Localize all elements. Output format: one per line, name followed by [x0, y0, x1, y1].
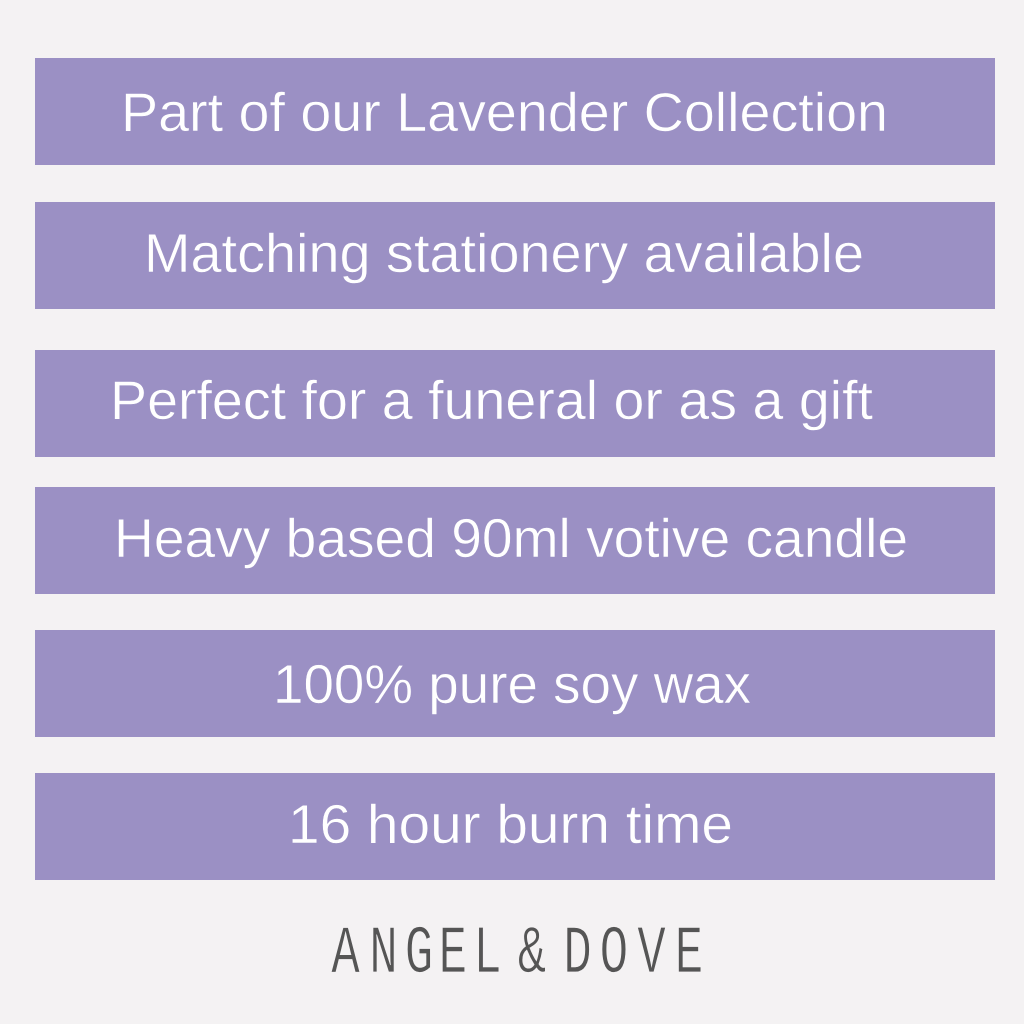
panel: soy wax: [35, 630, 995, 737]
panel: votive candle: [35, 487, 995, 594]
panel: burn time: [35, 773, 995, 880]
panel: matching stationery: Matching stationery available: [144, 222, 864, 284]
logo: Angel & Dove: ANGEL&DOVE: [331, 915, 703, 993]
panel: burn time: 16 hour burn time: [288, 793, 733, 855]
panel: funeral or gift: Perfect for a funeral or as a gift: [110, 369, 873, 431]
panel: lavender collection: [35, 58, 995, 165]
panel: soy wax: 100% pure soy wax: [273, 653, 751, 715]
panel: funeral or gift: [35, 350, 995, 457]
panel: matching stationery: [35, 202, 995, 309]
panel: votive candle: Heavy based 90ml votive candle: [114, 507, 908, 569]
panel: lavender collection: Part of our Lavender Collection: [121, 81, 888, 143]
